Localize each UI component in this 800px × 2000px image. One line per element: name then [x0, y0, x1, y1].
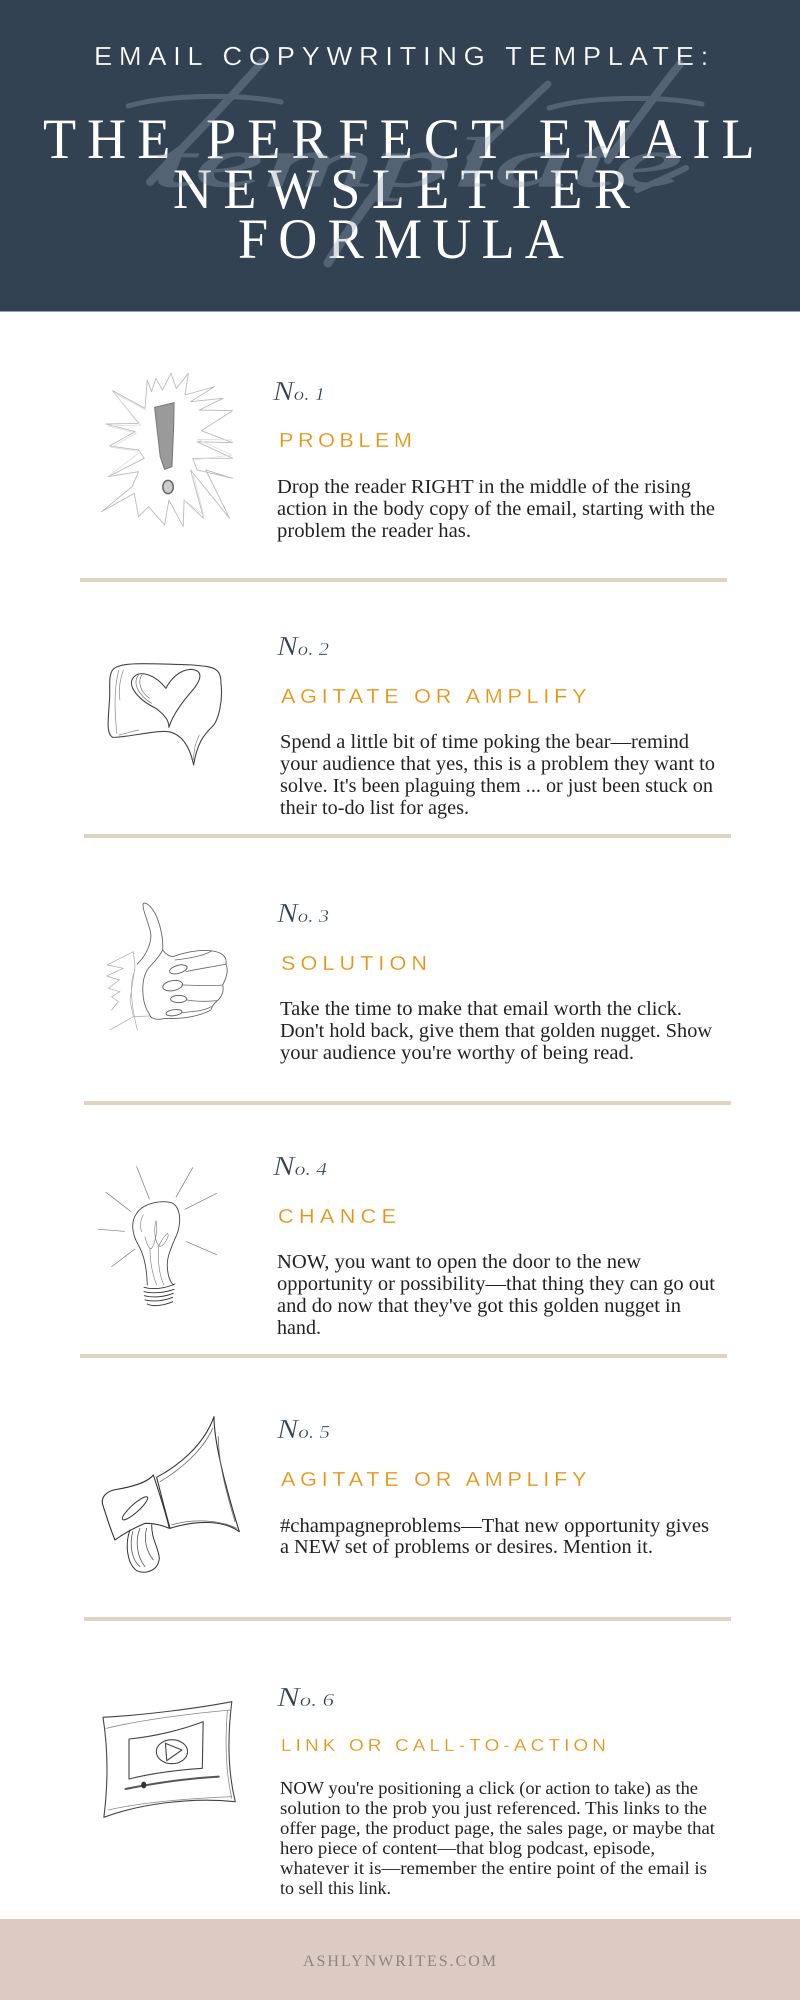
icon: megaphone [102, 1417, 239, 1572]
panel: step 2 agitate or amplify [108, 631, 715, 819]
panel: header [0, 0, 800, 312]
body text: #champagneproblems—That new opportunity gives [280, 1515, 709, 1537]
footer band [0, 1919, 800, 2000]
heading: PROBLEM [279, 430, 412, 452]
body text: offer page, the product page, the sales page, or maybe that [280, 1818, 715, 1838]
body text: and do now that they've got this golden nugget in [277, 1295, 681, 1317]
panel: step 5 agitate or amplify [102, 1414, 709, 1572]
heading: AGITATE OR AMPLIFY [281, 686, 587, 708]
heading: LINK OR CALL-TO-ACTION [281, 1736, 606, 1755]
body text: NOW, you want to open the door to the new [277, 1251, 642, 1273]
heading: AGITATE OR AMPLIFY [281, 1469, 587, 1491]
body text: a NEW set of problems or desires. Mention it. [280, 1536, 653, 1558]
subtitle: EMAIL COPYWRITING TEMPLATE: [94, 42, 708, 71]
title: THE PERFECT EMAIL [43, 108, 755, 171]
body text [277, 1251, 715, 1339]
icon: thumbs up [107, 903, 227, 1030]
heading: CHANCE [278, 1206, 396, 1228]
step number: No. 2 [276, 631, 329, 661]
body text: opportunity or possibility—that thing they can go out [277, 1273, 715, 1295]
body text [280, 1778, 715, 1898]
icon: heart speech bubble [108, 664, 222, 765]
title: NEWSLETTER [173, 158, 630, 221]
icon: video player [103, 1702, 235, 1817]
body text: action in the body copy of the email, starting with the [277, 498, 715, 520]
body text: their to-do list for ages. [280, 797, 469, 819]
icon: exclamation burst [102, 373, 233, 527]
body text: solution to the prob you just referenced. This links to the [280, 1798, 707, 1818]
panel: step 3 solution [107, 898, 713, 1064]
footer url: ASHLYNWRITES.COM [303, 1953, 496, 1970]
body text: Spend a little bit of time poking the bear—remind [280, 731, 689, 753]
step number: No. 1 [272, 376, 325, 406]
heading: SOLUTION [281, 953, 427, 975]
body text [280, 731, 715, 819]
body text: NOW you're positioning a click (or action to take) as the [280, 1778, 698, 1799]
title [43, 108, 755, 271]
watermark script word [128, 62, 702, 263]
step number: No. 3 [276, 898, 329, 928]
step number: No. 4 [272, 1151, 327, 1181]
body text: problem the reader has. [277, 520, 471, 542]
body text: Don't hold back, give them that golden nugget. Show [280, 1020, 713, 1042]
body text: Take the time to make that email worth the click. [280, 998, 682, 1020]
step number: N o. 6 [276, 1682, 334, 1712]
body text [277, 476, 715, 542]
body text: whatever it is—remember the entire point of the email is [280, 1858, 707, 1878]
body text: your audience that yes, this is a problem they want to [280, 753, 715, 775]
title: FORMULA [238, 208, 564, 271]
body text: hand. [277, 1317, 321, 1339]
body text: solve. It's been plaguing them ... or just been stuck on [280, 775, 713, 797]
body text: to sell this link. [280, 1878, 391, 1898]
panel: step 4 chance [98, 1151, 715, 1339]
body text: Drop the reader RIGHT in the middle of the rising [277, 476, 691, 498]
body text [280, 1515, 709, 1558]
panel: step 1 problem [102, 373, 715, 542]
icon: light bulb [98, 1167, 217, 1306]
body text: your audience you're worthy of being read. [280, 1042, 634, 1064]
body text: hero piece of content—that blog podcast, episode, [280, 1838, 655, 1858]
step number: No. 5 [276, 1414, 330, 1444]
watermark script word: template [152, 125, 682, 202]
body text [280, 998, 713, 1064]
panel: step 6 link or call-to-action [103, 1682, 715, 1898]
